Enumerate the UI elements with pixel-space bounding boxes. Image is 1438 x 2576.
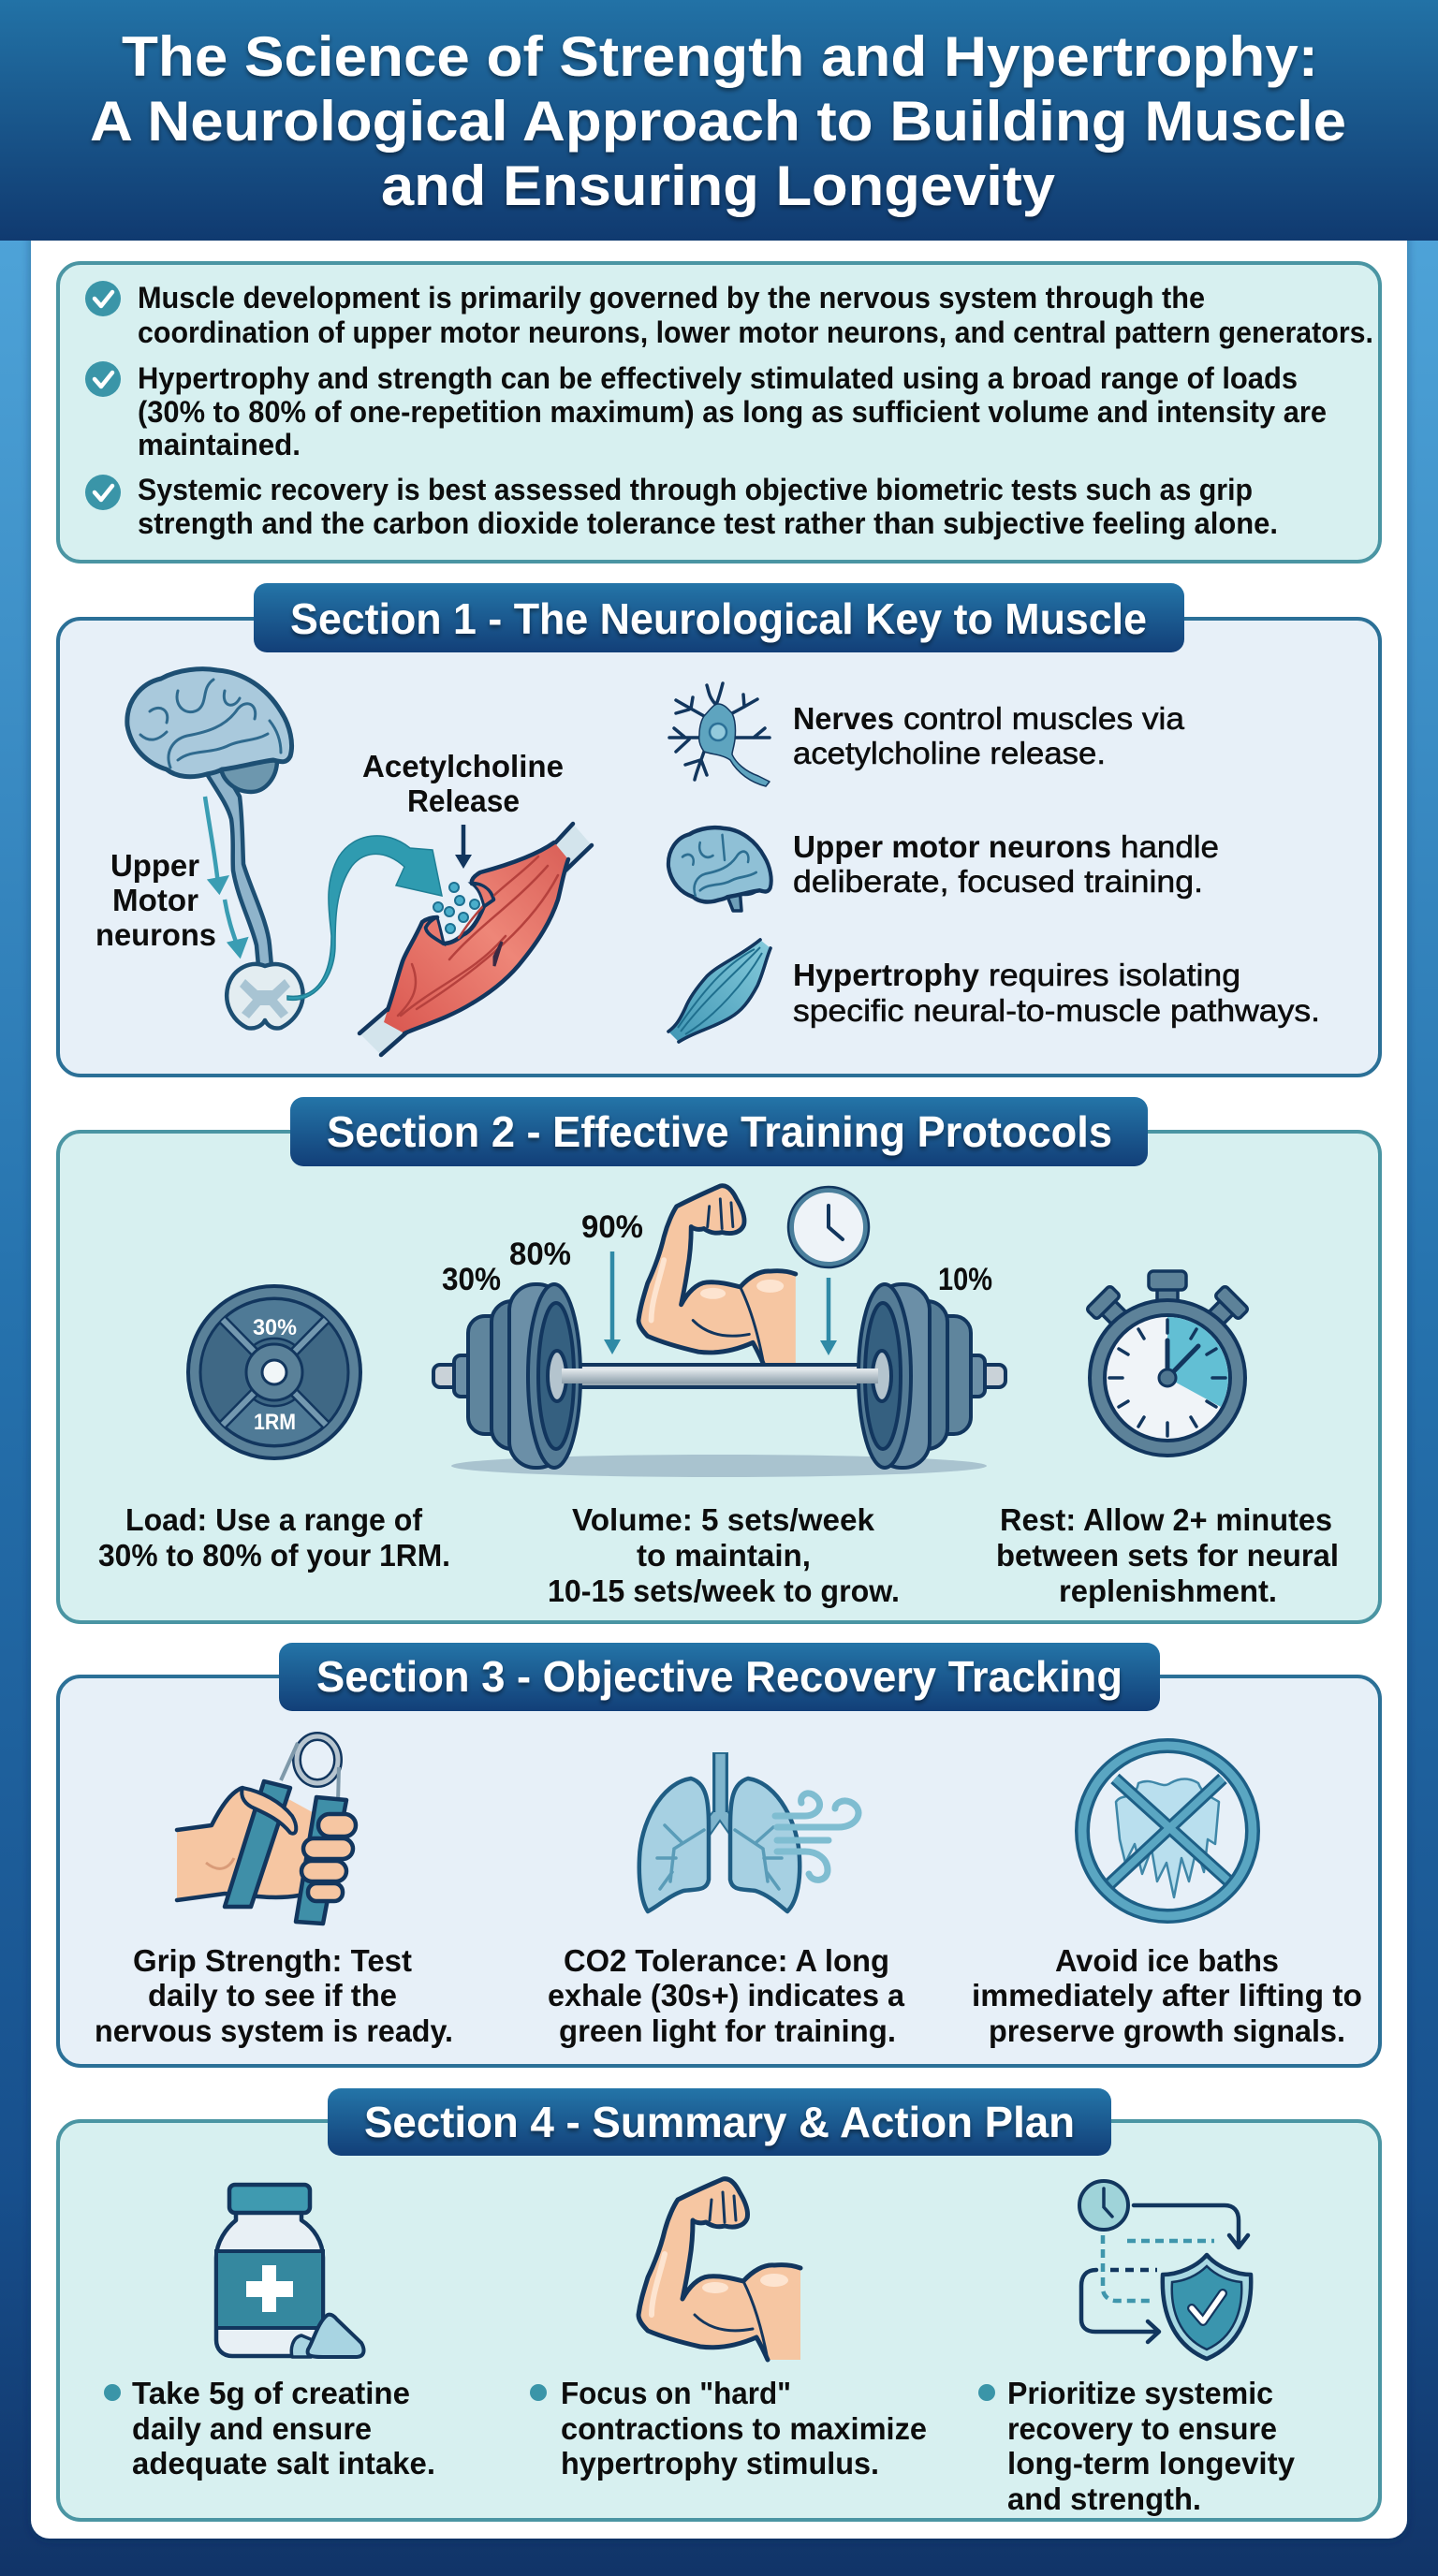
label: upper motor neurons: neurons bbox=[95, 917, 216, 952]
takeaway 1: coordination of upper motor neurons, lower motor neurons, and central pattern generators. bbox=[138, 315, 1373, 349]
icon: no ice bath bbox=[1082, 1746, 1253, 1916]
text: upper motor neurons: Upper motor neurons bbox=[793, 829, 1111, 864]
icon: flexed arm bbox=[638, 1186, 796, 1365]
arrow: rest pointer bbox=[820, 1278, 837, 1355]
percent labels bbox=[442, 1209, 992, 1297]
takeaway 2 bbox=[138, 361, 1327, 461]
section 3 heading: Section 3 - Objective Recovery Tracking bbox=[316, 1652, 1123, 1701]
takeaway 3: strength and the carbon dioxide tolerance test rather than subjective feeling alone. bbox=[138, 506, 1278, 540]
arrow: signal to muscle bbox=[287, 836, 442, 1000]
icon: flexed arm bbox=[638, 2179, 800, 2360]
caption: ice baths: immediately after lifting to bbox=[972, 1978, 1362, 2012]
neurotransmitter dots bbox=[433, 883, 479, 933]
text: hypertrophy: Hypertrophy bbox=[793, 958, 980, 992]
icon: weight plate: 30% bbox=[253, 1315, 297, 1340]
text: upper motor neurons bbox=[793, 829, 1219, 899]
percent labels: 90% bbox=[581, 1209, 643, 1245]
icon: neuron bbox=[669, 683, 770, 786]
takeaway 3: Systemic recovery is best assessed through objective biometric tests such as grip bbox=[138, 473, 1253, 506]
section 3 heading bbox=[279, 1643, 1160, 1711]
icon: weight plate: 1RM bbox=[254, 1410, 296, 1435]
takeaway 2: Hypertrophy and strength can be effectively stimulated using a broad range of loads bbox=[138, 361, 1298, 395]
icon: torn muscle bbox=[360, 824, 592, 1055]
title: and Ensuring Longevity bbox=[381, 154, 1056, 217]
label: upper motor neurons: Motor bbox=[112, 883, 198, 917]
caption: grip strength bbox=[95, 1943, 453, 2048]
barbell shadow bbox=[451, 1455, 987, 1477]
caption: load: 30% to 80% of your 1RM. bbox=[98, 1538, 450, 1573]
icon: check 1 bbox=[85, 281, 121, 316]
section 2 heading: Section 2 - Effective Training Protocols bbox=[327, 1107, 1112, 1156]
icon: check 2 bbox=[85, 361, 121, 397]
icon: lungs bbox=[639, 1753, 800, 1911]
action: hard contractions: contractions to maximize bbox=[561, 2411, 927, 2446]
caption: ice baths: Avoid ice baths bbox=[1055, 1943, 1279, 1978]
caption: volume: to maintain, bbox=[637, 1538, 811, 1573]
title bbox=[90, 25, 1346, 217]
caption: ice baths: preserve growth signals. bbox=[989, 2013, 1345, 2048]
icon: creatine bottle bbox=[216, 2185, 363, 2357]
icon: brain and spinal cord bbox=[127, 669, 303, 1029]
caption: ice baths bbox=[972, 1943, 1362, 2048]
section 1 heading bbox=[254, 583, 1184, 652]
barbell bar bbox=[558, 1365, 882, 1387]
barbell left plates bbox=[433, 1284, 580, 1468]
action: hard contractions: Focus on "hard" bbox=[561, 2376, 791, 2410]
caption: CO2 tolerance: CO2 Tolerance: A long bbox=[564, 1943, 889, 1978]
text: hypertrophy bbox=[793, 958, 1320, 1028]
title: A Neurological Approach to Building Muscle bbox=[90, 90, 1346, 153]
action: hard contractions bbox=[530, 2376, 927, 2481]
caption: grip strength: daily to see if the bbox=[148, 1978, 397, 2012]
caption: grip strength: Grip Strength: Test bbox=[133, 1943, 412, 1978]
icon: barbell bbox=[433, 1284, 1005, 1468]
icon: clock bbox=[788, 1187, 869, 1267]
icon: stopwatch bbox=[1086, 1271, 1249, 1456]
label: acetylcholine release: Release bbox=[407, 783, 520, 818]
panel: key takeaways bbox=[58, 263, 1380, 562]
label: acetylcholine release: Acetylcholine bbox=[362, 749, 564, 783]
section 4 heading: Section 4 - Summary & Action Plan bbox=[364, 2098, 1075, 2146]
caption: volume bbox=[548, 1502, 900, 1608]
panel: section 3 bbox=[58, 1643, 1380, 2066]
caption: rest bbox=[996, 1502, 1339, 1608]
label: upper motor neurons: Upper bbox=[110, 848, 199, 883]
takeaway 1 bbox=[138, 281, 1373, 349]
text: nerves: acetylcholine release. bbox=[793, 736, 1106, 770]
text: nerves bbox=[793, 701, 1185, 770]
panel: section 2 bbox=[58, 1097, 1380, 1622]
label: acetylcholine release bbox=[362, 749, 564, 818]
caption: CO2 tolerance: exhale (30s+) indicates a bbox=[548, 1978, 905, 2012]
action: systemic recovery: Prioritize systemic bbox=[1007, 2376, 1273, 2410]
text: hypertrophy: specific neural-to-muscle pathways. bbox=[793, 993, 1320, 1028]
action: creatine bbox=[104, 2376, 435, 2481]
action: creatine: adequate salt intake. bbox=[132, 2446, 435, 2481]
action: hard contractions: hypertrophy stimulus. bbox=[561, 2446, 879, 2481]
action: systemic recovery: recovery to ensure bbox=[1007, 2411, 1277, 2446]
section 4 heading bbox=[328, 2088, 1111, 2156]
takeaway 2: maintained. bbox=[138, 428, 301, 461]
section 2 heading bbox=[290, 1097, 1148, 1166]
icon: weight plate bbox=[188, 1286, 360, 1458]
takeaway 1: Muscle development is primarily governed by the nervous system through the bbox=[138, 281, 1205, 315]
text: hypertrophy: requires isolating bbox=[989, 958, 1240, 992]
panel: section 1 bbox=[58, 583, 1380, 1076]
icon: check 3 bbox=[85, 475, 121, 510]
caption: rest: Rest: Allow 2+ minutes bbox=[1000, 1502, 1332, 1537]
action: systemic recovery: long-term longevity bbox=[1007, 2446, 1296, 2481]
caption: load: Load: Use a range of bbox=[125, 1502, 423, 1537]
action: systemic recovery bbox=[978, 2376, 1296, 2516]
takeaway 3 bbox=[138, 473, 1278, 540]
arrow: 90% pointer bbox=[604, 1251, 621, 1354]
text: nerves: control muscles via bbox=[903, 701, 1185, 736]
label: upper motor neurons bbox=[95, 848, 216, 952]
title: The Science of Strength and Hypertrophy: bbox=[122, 25, 1318, 88]
caption: CO2 tolerance: green light for training. bbox=[559, 2013, 896, 2048]
action: creatine: daily and ensure bbox=[132, 2411, 372, 2446]
icon: small muscle bbox=[668, 940, 770, 1042]
barbell right plates bbox=[858, 1284, 1005, 1468]
percent labels: 80% bbox=[509, 1237, 571, 1272]
caption: volume: 10-15 sets/week to grow. bbox=[548, 1573, 900, 1608]
caption: CO2 tolerance bbox=[548, 1943, 905, 2048]
percent labels: 30% bbox=[442, 1262, 501, 1297]
caption: rest: replenishment. bbox=[1059, 1573, 1277, 1608]
icon: small brain bbox=[668, 827, 771, 911]
section 1 heading: Section 1 - The Neurological Key to Muscle bbox=[290, 594, 1147, 643]
action: creatine: Take 5g of creatine bbox=[132, 2376, 410, 2410]
percent labels: 10% bbox=[938, 1262, 992, 1297]
caption: grip strength: nervous system is ready. bbox=[95, 2013, 453, 2048]
takeaway 2: (30% to 80% of one-repetition maximum) as long as sufficient volume and intensity are bbox=[138, 395, 1327, 429]
icon: recovery flow and shield bbox=[1079, 2181, 1251, 2359]
text: upper motor neurons: handle bbox=[1121, 829, 1219, 864]
icon: exhale air bbox=[775, 1793, 858, 1880]
caption: load bbox=[98, 1502, 450, 1573]
arrow: descending signal bbox=[205, 797, 245, 955]
icon: hand grip bbox=[177, 1736, 356, 1924]
text: upper motor neurons: deliberate, focused training. bbox=[793, 864, 1203, 899]
header banner bbox=[0, 0, 1438, 241]
arrow: release pointer bbox=[455, 825, 472, 869]
action: systemic recovery: and strength. bbox=[1007, 2481, 1201, 2516]
text: nerves: Nerves bbox=[793, 701, 894, 736]
caption: rest: between sets for neural bbox=[996, 1538, 1339, 1573]
panel: section 4 bbox=[58, 2088, 1380, 2520]
caption: volume: Volume: 5 sets/week bbox=[572, 1502, 875, 1537]
